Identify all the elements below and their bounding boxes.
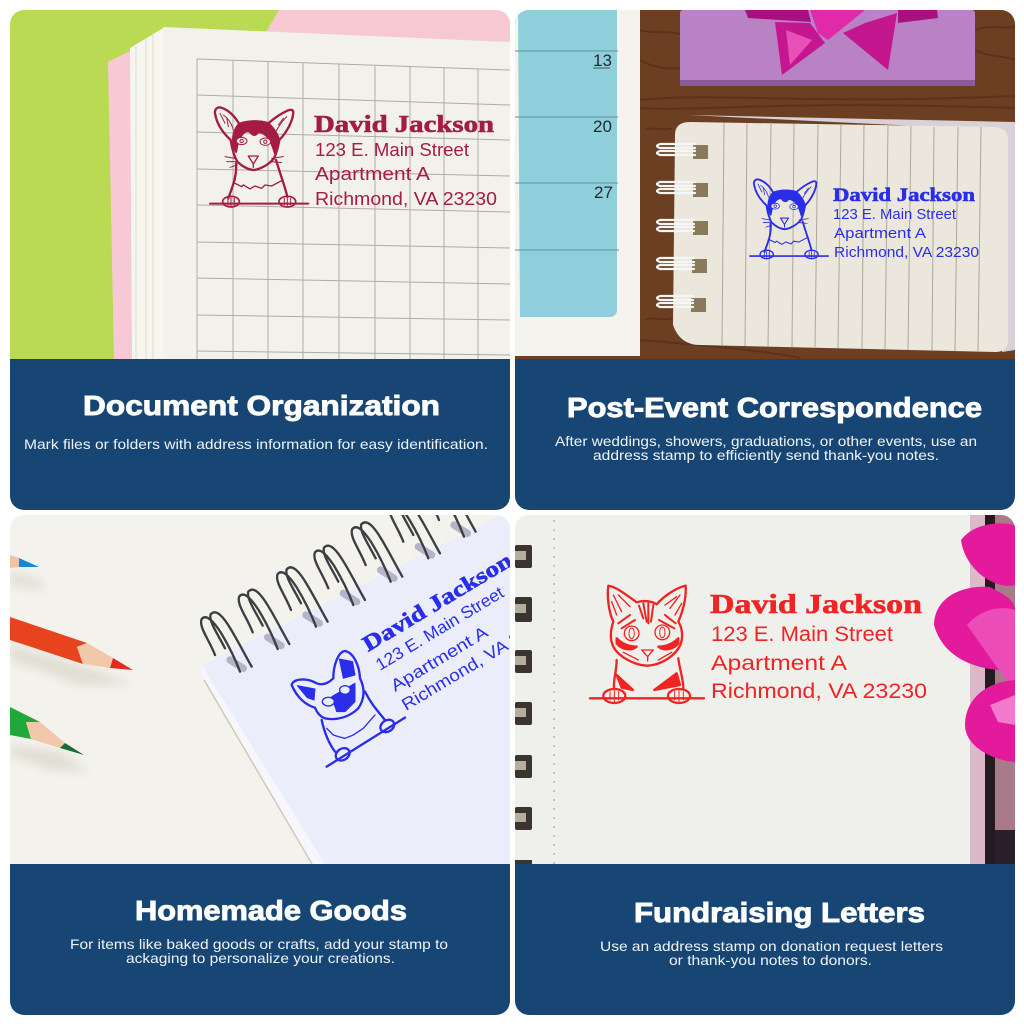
banner: Post-Event Correspondence — [515, 359, 1015, 510]
calendar date numbers: 13 — [593, 51, 612, 70]
panel: Post-Event Correspondence — [515, 10, 1015, 510]
stamp: cat and address in red: Apartment A — [711, 652, 847, 675]
stamp: cat and address in crimson: Apartment A — [315, 164, 430, 184]
banner: Homemade Goods: For items like baked goods or crafts, add your stamp to — [70, 936, 448, 952]
stamp: cat and rotated address in blue: 123 E. Main Street — [372, 583, 507, 674]
banner: Fundraising Letters: Use an address stamp on donation request letters — [600, 938, 943, 954]
right edge strips — [970, 515, 1015, 864]
spiral notebook — [657, 115, 1015, 352]
photo: textured notebook page with flowers — [515, 515, 1015, 866]
panel: Document Organization — [10, 10, 510, 510]
banner: Homemade Goods: ackaging to personalize your creations. — [126, 950, 395, 966]
banner: Post-Event Correspondence: address stamp to efficiently send thank-you notes. — [593, 447, 939, 463]
gift box with bow — [680, 10, 975, 86]
panel: Homemade Goods — [10, 515, 510, 1015]
stamp: cat and address in red: 123 E. Main Street — [711, 623, 893, 646]
stamp: cat and address in crimson: 123 E. Main Street — [315, 140, 469, 160]
stamp: cat and address in crimson — [210, 107, 497, 209]
photo: grid notebook on green and pink background — [10, 10, 510, 359]
stamp: cat and address in blue: 123 E. Main Street — [833, 207, 956, 223]
calendar date numbers: 27 — [594, 183, 613, 202]
stamp: cat and address in red — [590, 586, 927, 703]
banner: Document Organization: Mark files or folders with address information for easy identification. — [24, 436, 488, 452]
notepad — [203, 515, 510, 864]
stamp: cat and rotated address in blue — [290, 557, 510, 768]
photo: pencils and spiral notepad — [10, 477, 510, 864]
stamp: cat and address in blue: Richmond, VA 23230 — [834, 245, 979, 261]
banner: Homemade Goods: Homemade Goods — [135, 895, 407, 926]
banner: Post-Event Correspondence: After weddings, showers, graduations, or other events, use an — [555, 433, 977, 449]
stamp: cat and address in blue: David Jackson — [833, 185, 976, 206]
spiral rings — [201, 477, 476, 672]
calendar date numbers: 20 — [593, 117, 612, 136]
banner: Document Organization: Document Organization — [83, 390, 440, 421]
stamp: cat and rotated address in blue: Richmond, VA 23230 — [398, 606, 561, 714]
perforation — [553, 520, 555, 864]
banner: Post-Event Correspondence: Post-Event Correspondence — [567, 392, 982, 423]
binder holes — [515, 545, 532, 866]
banner: Homemade Goods — [10, 864, 510, 1015]
flower petals — [934, 524, 1015, 762]
banner: Fundraising Letters: Fundraising Letters — [634, 897, 925, 928]
stamp: cat and address in blue — [750, 179, 979, 261]
stamp: cat and address in crimson: Richmond, VA 23230 — [315, 189, 497, 209]
photo: calendar, gift and spiral notebook on wood — [515, 10, 1015, 359]
banner: Document Organization — [10, 359, 510, 510]
cat drawing — [292, 651, 405, 767]
stamp: cat and address in blue: Apartment A — [834, 226, 926, 242]
banner: Fundraising Letters: or thank-you notes to donors. — [669, 952, 872, 968]
stamp: cat and address in red: David Jackson — [710, 589, 922, 619]
pencils — [10, 555, 135, 772]
banner: Fundraising Letters — [515, 864, 1015, 1015]
stamp: cat and rotated address in blue: Apartment A — [387, 622, 492, 695]
calendar date numbers — [593, 51, 613, 202]
panel: Fundraising Letters — [515, 515, 1015, 1015]
stamp: cat and rotated address in blue: David Jackson — [358, 547, 516, 656]
stamp: cat and address in crimson: David Jackson — [314, 112, 494, 138]
stamp: cat and address in red: Richmond, VA 23230 — [711, 680, 927, 703]
